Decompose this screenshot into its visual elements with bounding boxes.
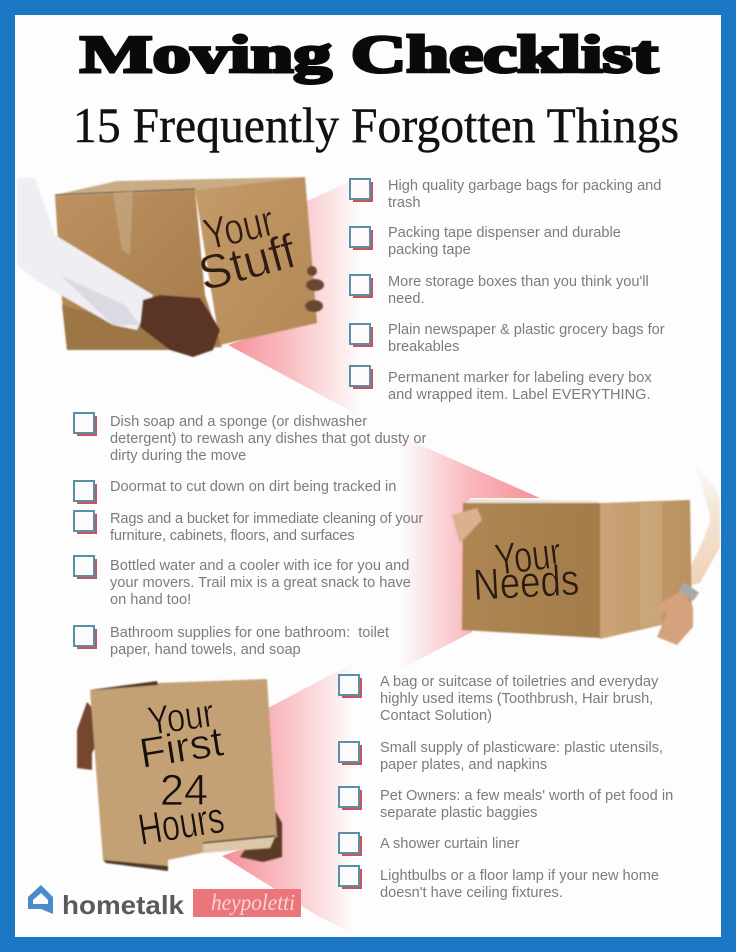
item text: need.: [388, 291, 425, 307]
item: [338, 674, 362, 698]
item text: paper plates, and napkins: [380, 757, 547, 773]
box photo: your stuff: Stuff: [193, 225, 302, 302]
item text: doesn't have ceiling fixtures.: [380, 885, 563, 901]
item text: separate plastic baggies: [380, 805, 537, 821]
item text: on hand too!: [110, 592, 191, 608]
checklist: your stuff: [349, 178, 665, 403]
box photo: your first 24 hours: [77, 679, 282, 871]
item text: More storage boxes than you think you'll: [388, 274, 649, 290]
item text: and wrapped item. Label EVERYTHING.: [388, 387, 651, 403]
item text: detergent) to rewash any dishes that got dusty or: [110, 431, 426, 447]
item text: Lightbulbs or a floor lamp if your new home: [380, 868, 659, 884]
box photo: your first 24 hours: First: [136, 717, 227, 777]
item text: Pet Owners: a few meals' worth of pet food in: [380, 788, 673, 804]
item text: [380, 674, 658, 724]
item: [338, 786, 362, 810]
item text: Contact Solution): [380, 708, 492, 724]
item text: A bag or suitcase of toiletries and everyday: [380, 674, 658, 690]
item text: Bottled water and a cooler with ice for you and: [110, 558, 409, 574]
item: [349, 178, 373, 202]
item text: [388, 274, 649, 307]
item text: [380, 868, 659, 901]
item text: A shower curtain liner: [380, 836, 520, 852]
checklist: your first 24 hours: [338, 674, 673, 901]
item: [73, 412, 97, 436]
item text: dirty during the move: [110, 448, 246, 464]
subtitle: 15 Frequently Forgotten Things: [73, 97, 679, 153]
item: [73, 625, 97, 649]
item text: Plain newspaper & plastic grocery bags for: [388, 322, 665, 338]
item: [73, 510, 97, 534]
item text: paper, hand towels, and soap: [110, 642, 301, 658]
box photo: your stuff: Your: [199, 196, 278, 260]
box photo: your needs: [452, 460, 720, 645]
item: [73, 555, 97, 579]
cone: your needs: [400, 436, 540, 672]
item text: breakables: [388, 339, 459, 355]
cone: your first 24 hours: [222, 662, 355, 935]
item: [349, 365, 373, 389]
title: Moving Checklist: [80, 26, 658, 84]
item: [349, 226, 373, 250]
item text: trash: [388, 195, 420, 211]
box photo: your first 24 hours: 24: [160, 766, 208, 815]
item text: [380, 788, 673, 821]
item text: Small supply of plasticware: plastic utensils,: [380, 740, 663, 756]
hands: [452, 508, 482, 543]
item text: [388, 370, 652, 403]
cone: your stuff: [228, 176, 362, 420]
item: [349, 274, 373, 298]
item text: [110, 558, 411, 608]
item: [338, 741, 362, 765]
box photo: your needs: Needs: [472, 556, 580, 610]
item text: Doormat to cut down on dirt being tracked in: [110, 478, 396, 494]
item text: Permanent marker for labeling every box: [388, 370, 652, 386]
item text: Bathroom supplies for one bathroom: toilet: [110, 624, 389, 640]
box photo: your first 24 hours: Your: [145, 691, 217, 744]
item: [338, 865, 362, 889]
item text: highly used items (Toothbrush, Hair brush,: [380, 691, 653, 707]
hand: [140, 295, 220, 357]
box photo: your needs: Your: [492, 528, 564, 585]
item text: Dish soap and a sponge (or dishwasher: [110, 414, 367, 430]
item text: [388, 178, 661, 211]
item text: your movers. Trail mix is a great snack to have: [110, 575, 411, 591]
item text: furniture, cabinets, floors, and surfaces: [110, 528, 354, 544]
logo: hometalk: hometalk: [62, 890, 185, 920]
item text: [388, 224, 621, 258]
checklist: your needs: [73, 412, 426, 658]
item text: [110, 624, 389, 658]
logo: heypoletti: heypoletti: [211, 890, 295, 915]
box photo: your first 24 hours: Hours: [135, 793, 228, 855]
item: [338, 832, 362, 856]
logo: hometalk: [28, 885, 185, 920]
item: [349, 323, 373, 347]
item text: [388, 322, 665, 355]
item text: High quality garbage bags for packing and: [388, 178, 661, 194]
box photo: your stuff: [17, 177, 324, 357]
item text: Packing tape dispenser and durable: [388, 224, 621, 240]
item text: packing tape: [388, 242, 471, 258]
item text: [110, 414, 426, 464]
item: [73, 480, 97, 504]
item text: Rags and a bucket for immediate cleaning of your: [110, 510, 423, 526]
sleeve: [17, 178, 153, 330]
item text: [380, 740, 663, 773]
item text: [110, 510, 423, 544]
